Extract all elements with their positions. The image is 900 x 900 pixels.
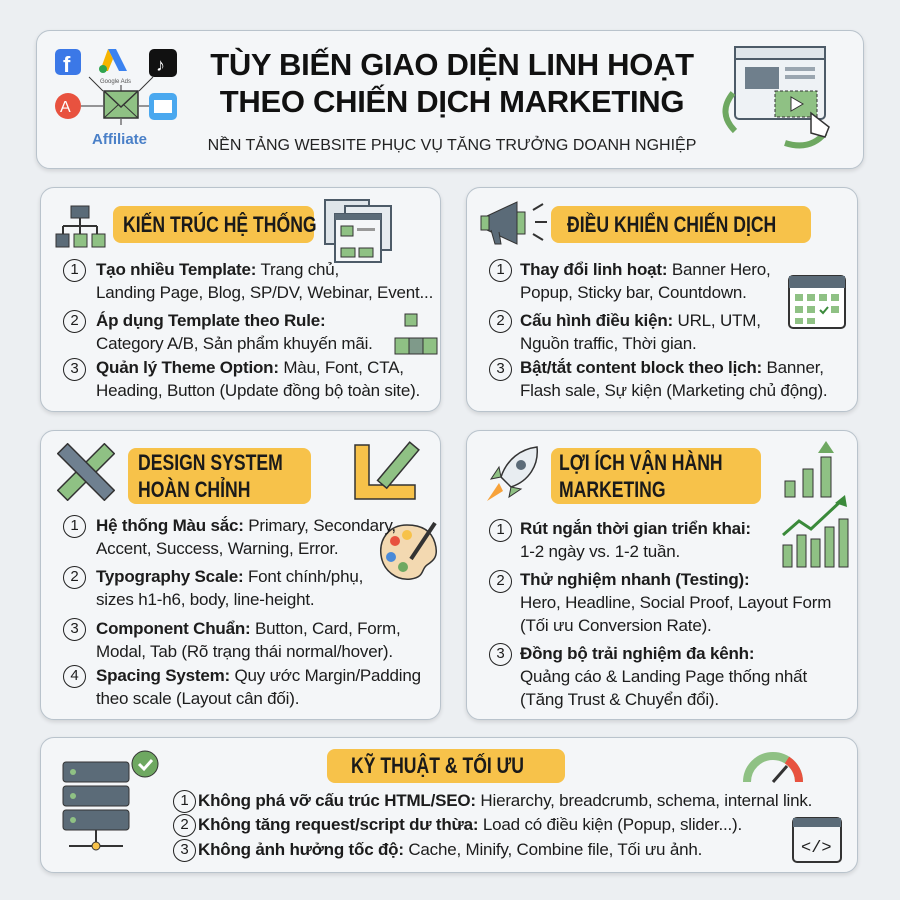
panel: kiến trúc hệ thống: Category A/B, Sản phẩm khuyến mãi. bbox=[96, 334, 373, 353]
item 1 bbox=[489, 259, 771, 302]
item 3 bbox=[63, 618, 400, 661]
panel: design system bbox=[40, 430, 441, 720]
panel: design system: Hệ thống Màu sắc: Primary, Secondary, bbox=[96, 516, 396, 535]
icon: marketing channels: Google Ads bbox=[100, 79, 131, 85]
panel: design system: sizes h1-h6, body, line-height. bbox=[96, 590, 314, 609]
heading: HOÀN CHỈNH bbox=[138, 477, 250, 502]
icon: square ruler pencil bbox=[354, 441, 420, 500]
icon: templates bbox=[324, 199, 392, 263]
panel: design system: 4 bbox=[70, 667, 79, 684]
subtitle: NỀN TẢNG WEBSITE PHỤC VỤ TĂNG TRƯỞNG DOANH NGHIỆP bbox=[208, 137, 696, 154]
panel: điều khiển chiến dịch: 1 bbox=[496, 261, 505, 278]
heading bbox=[128, 448, 311, 504]
panel: design system: Component Chuẩn: Button, Card, Form, bbox=[96, 619, 400, 638]
panel: design system: 3 bbox=[70, 620, 79, 637]
panel: kiến trúc hệ thống: 2 bbox=[70, 312, 79, 329]
panel: kiến trúc hệ thống: Heading, Button (Update đồng bộ toàn site). bbox=[96, 381, 420, 400]
item 1 bbox=[173, 790, 812, 813]
panel: design system: Typography Scale: Font chính/phụ, bbox=[96, 567, 363, 586]
panel: kỹ thuật & tối ưu: Không tăng request/script dư thừa: Load có điều kiện (Popup, slider...). bbox=[198, 815, 742, 834]
panel: design system: 2 bbox=[70, 568, 79, 585]
item 1 bbox=[489, 519, 751, 561]
panel: design system: theo scale (Layout cân đối). bbox=[96, 689, 299, 708]
icon: megaphone bbox=[480, 201, 547, 245]
heading: MARKETING bbox=[559, 477, 666, 502]
icon: blocks bbox=[394, 314, 438, 354]
panel: kỹ thuật & tối ưu: 2 bbox=[180, 816, 189, 833]
heading bbox=[551, 448, 761, 504]
title bbox=[210, 47, 694, 119]
panel: điều khiển chiến dịch: Flash sale, Sự kiện (Marketing chủ động). bbox=[520, 381, 827, 400]
icon: marketing channels bbox=[55, 49, 177, 148]
item 3 bbox=[489, 643, 808, 709]
panel: kiến trúc hệ thống bbox=[40, 187, 441, 412]
item 2 bbox=[63, 566, 363, 609]
panel: kỹ thuật & tối ưu: Không phá vỡ cấu trúc HTML/SEO: Hierarchy, breadcrumb, schema, internal link. bbox=[198, 791, 812, 810]
panel: lợi ích vận hành: (Tối ưu Conversion Rate). bbox=[520, 616, 712, 635]
heading bbox=[327, 749, 565, 783]
item 2 bbox=[173, 814, 742, 837]
panel: điều khiển chiến dịch: Thay đổi linh hoạt: Banner Hero, bbox=[520, 260, 771, 279]
panel: kỹ thuật & tối ưu: 3 bbox=[180, 841, 189, 858]
panel: điều khiển chiến dịch: Cấu hình điều kiện: URL, UTM, bbox=[520, 311, 761, 330]
panel: điều khiển chiến dịch: 3 bbox=[496, 360, 505, 377]
panel: kiến trúc hệ thống: 1 bbox=[70, 261, 79, 278]
icon: server bbox=[62, 750, 158, 850]
icon: marketing channels: Affiliate bbox=[92, 131, 147, 148]
panel: điều khiển chiến dịch: Popup, Sticky bar, Countdown. bbox=[520, 283, 747, 302]
panel: lợi ích vận hành: 3 bbox=[496, 645, 505, 662]
icon: browser video bbox=[722, 46, 830, 148]
heading: LỢI ÍCH VẬN HÀNH bbox=[559, 450, 723, 475]
panel: điều khiển chiến dịch: 2 bbox=[496, 312, 505, 329]
panel: design system: Accent, Success, Warning, Error. bbox=[96, 539, 338, 558]
panel: lợi ích vận hành: Quảng cáo & Landing Page thống nhất bbox=[520, 667, 807, 686]
panel: kiến trúc hệ thống: Landing Page, Blog, SP/DV, Webinar, Event... bbox=[96, 283, 433, 302]
icon: palette bbox=[380, 522, 437, 580]
heading bbox=[113, 206, 314, 243]
title: TÙY BIẾN GIAO DIỆN LINH HOẠT bbox=[210, 47, 694, 82]
title: THEO CHIẾN DỊCH MARKETING bbox=[220, 84, 684, 119]
panel: kiến trúc hệ thống: Áp dụng Template theo Rule: bbox=[96, 311, 325, 330]
item 3 bbox=[63, 358, 420, 400]
panel: design system: Spacing System: Quy ước Margin/Padding bbox=[96, 666, 421, 685]
icon: code window bbox=[792, 817, 842, 863]
icon: calendar bbox=[788, 275, 846, 329]
icon: hierarchy bbox=[56, 206, 106, 248]
panel: lợi ích vận hành: 1-2 ngày vs. 1-2 tuần. bbox=[520, 542, 680, 561]
item 2 bbox=[63, 310, 373, 353]
panel: kỹ thuật & tối ưu bbox=[40, 737, 858, 873]
panel: design system: Modal, Tab (Rõ trạng thái normal/hover). bbox=[96, 642, 393, 661]
header panel bbox=[36, 30, 864, 169]
panel: lợi ích vận hành: (Tăng Trust & Chuyển đổi). bbox=[520, 690, 719, 709]
panel: lợi ích vận hành: 2 bbox=[496, 572, 505, 589]
panel: lợi ích vận hành: 1 bbox=[496, 521, 505, 538]
item 2 bbox=[489, 310, 761, 353]
panel: điều khiển chiến dịch bbox=[466, 187, 858, 412]
icon: marketing channels: f bbox=[63, 52, 71, 77]
heading: KIẾN TRÚC HỆ THỐNG bbox=[123, 212, 317, 237]
icon: marketing channels: A bbox=[60, 99, 71, 116]
panel: điều khiển chiến dịch: Bật/tắt content block theo lịch: Banner, bbox=[520, 358, 824, 377]
panel: lợi ích vận hành: Hero, Headline, Social Proof, Layout Form bbox=[520, 593, 831, 612]
item 1 bbox=[63, 515, 396, 558]
panel: design system: 1 bbox=[70, 517, 79, 534]
item 1 bbox=[63, 259, 433, 302]
icon: marketing channels: ♪ bbox=[156, 55, 165, 75]
heading: DESIGN SYSTEM bbox=[138, 450, 283, 475]
icon: rocket bbox=[487, 446, 538, 501]
panel: lợi ích vận hành: Thử nghiệm nhanh (Testing): bbox=[520, 570, 749, 589]
item 2 bbox=[489, 570, 831, 635]
heading bbox=[551, 206, 811, 243]
item 3 bbox=[489, 358, 827, 400]
panel: kiến trúc hệ thống: 3 bbox=[70, 360, 79, 377]
panel: kiến trúc hệ thống: Tạo nhiều Template: Trang chủ, bbox=[96, 260, 339, 279]
panel: lợi ích vận hành bbox=[466, 430, 858, 720]
panel: kỹ thuật & tối ưu: Không ảnh hưởng tốc độ: Cache, Minify, Combine file, Tối ưu ảnh. bbox=[198, 840, 702, 859]
item 3 bbox=[173, 839, 702, 862]
heading: ĐIỀU KHIỂN CHIẾN DỊCH bbox=[567, 212, 776, 237]
icon: bar charts bbox=[782, 441, 848, 568]
panel: kỹ thuật & tối ưu: 1 bbox=[180, 792, 189, 809]
icon: gauge bbox=[743, 752, 803, 783]
panel: lợi ích vận hành: Rút ngắn thời gian triển khai: bbox=[520, 519, 751, 538]
panel: điều khiển chiến dịch: Nguồn traffic, Thời gian. bbox=[520, 334, 697, 353]
panel: lợi ích vận hành: Đồng bộ trải nghiệm đa kênh: bbox=[520, 644, 754, 663]
item 4 bbox=[63, 665, 421, 708]
icon: code window: </> bbox=[801, 839, 832, 858]
heading: KỸ THUẬT & TỐI ƯU bbox=[351, 753, 524, 778]
panel: kiến trúc hệ thống: Quản lý Theme Option: Màu, Font, CTA, bbox=[96, 358, 404, 377]
icon: ruler pencil bbox=[57, 443, 115, 501]
